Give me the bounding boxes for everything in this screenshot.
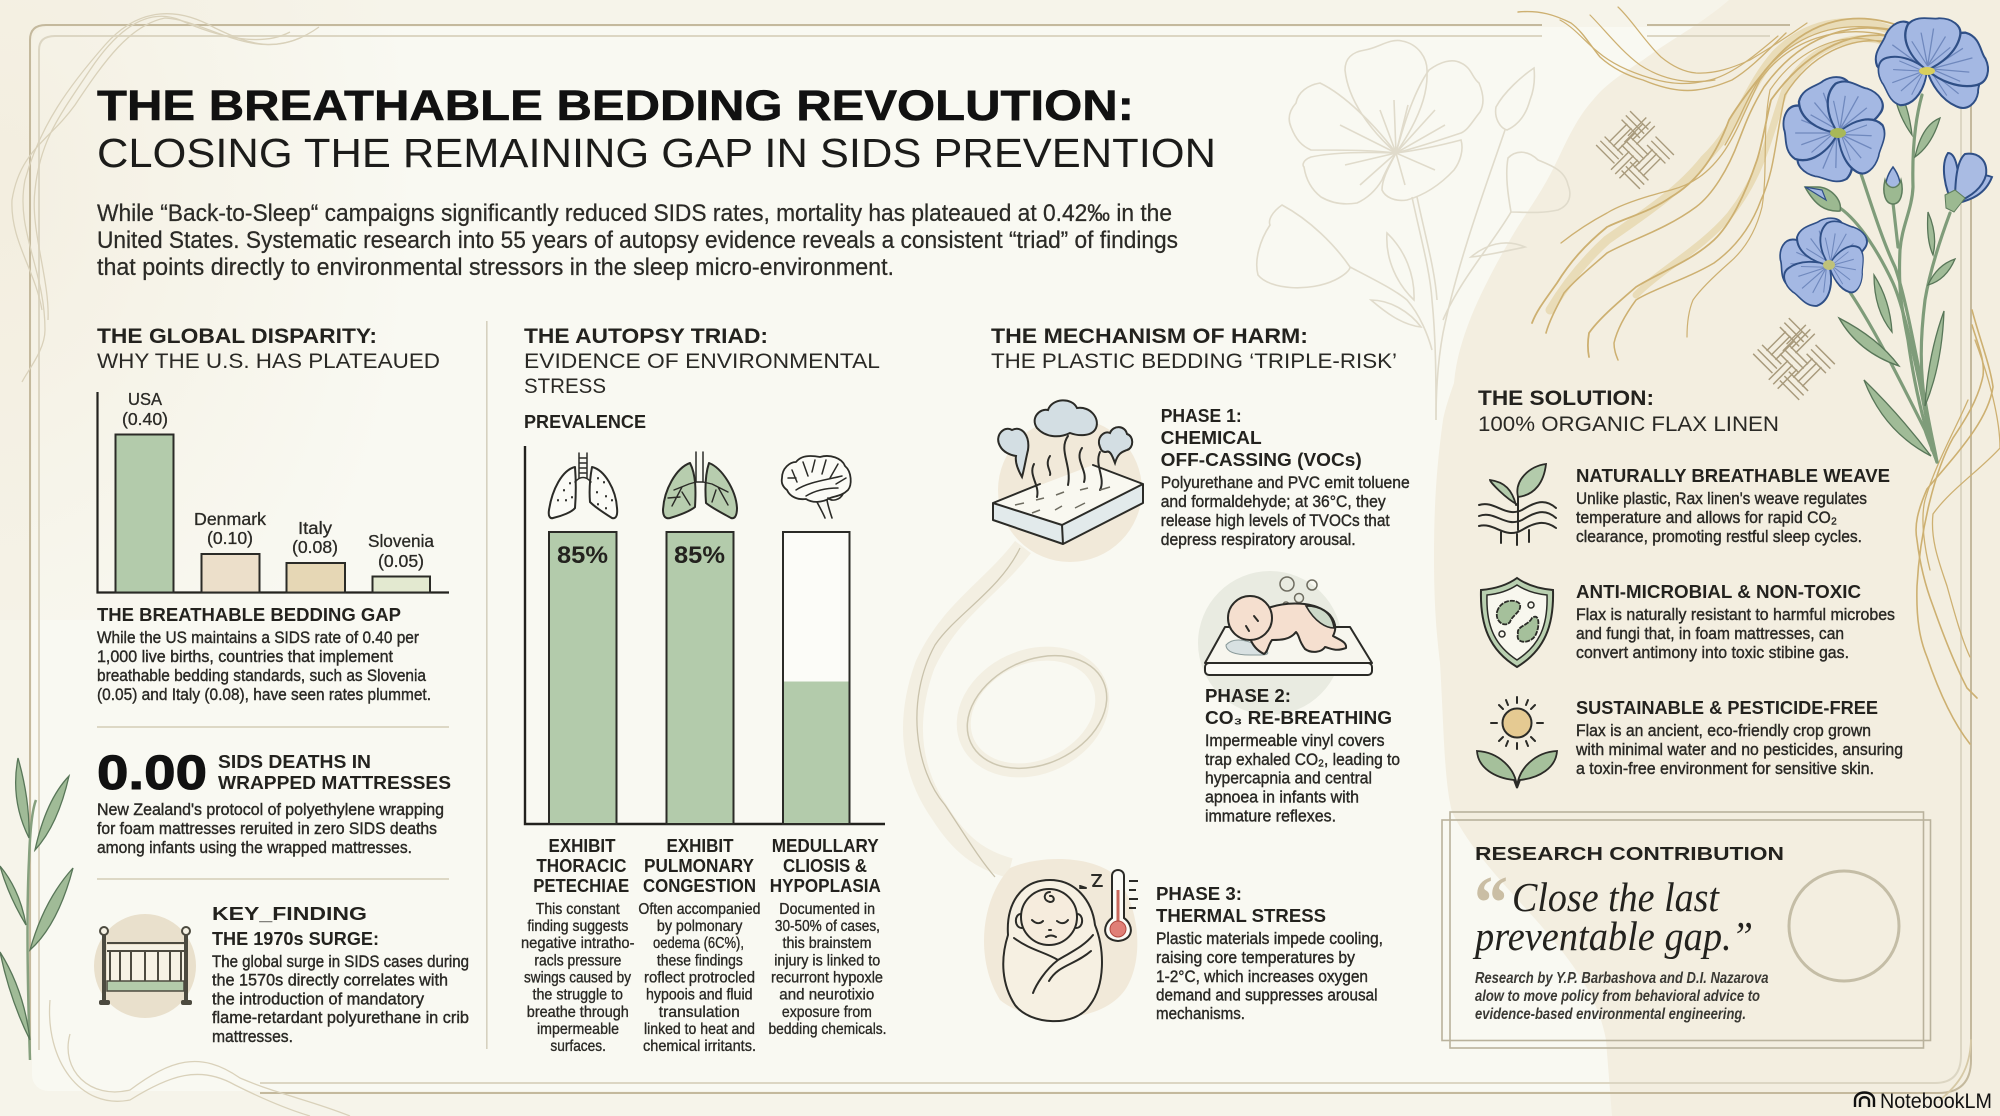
text block: phase 2: immature reflexes.	[1205, 806, 1336, 826]
text block: pulmonary congestion: chemical irritants.	[643, 1038, 756, 1055]
heading: the solution: 100% ORGANIC FLAX LINEN	[1478, 413, 1779, 436]
panel: the global disparity	[94, 325, 469, 1046]
intro paragraph: United States. Systematic research into 55 years of autopsy evidence reveals a consistent “triad” of findings	[97, 227, 1178, 254]
text block: pulmonary congestion: transulation	[659, 1004, 740, 1021]
labels: autopsy findings: CLIOSIS &	[783, 856, 867, 876]
text block: phase 1: PHASE 1:	[1161, 406, 1242, 426]
text block: phase 1: OFF-CASSING (VOCs)	[1161, 450, 1362, 470]
text block: naturally breathable weave: clearance, promoting restful sleep cycles.	[1576, 527, 1862, 546]
bar chart: SIDS rate by country: (0.08)	[292, 537, 338, 557]
text block: anti-microbial	[1576, 582, 1895, 662]
text block: medullary gliosis: injury is linked to	[774, 952, 880, 970]
text block: pulmonary congestion: by polmonary	[657, 918, 742, 935]
illustration: blue flax flowers and stems	[1779, 13, 1992, 462]
text block: pulmonary congestion	[638, 901, 760, 1055]
text block: phase 1: depress respiratory arousal.	[1161, 530, 1356, 549]
callout: research contribution: RESEARCH CONTRIBUTION	[1475, 844, 1784, 864]
callout: research contribution: “	[1474, 861, 1508, 945]
panel: the autopsy triad	[521, 325, 886, 1055]
text block: phase 2: trap exhaled CO₂, leading to	[1205, 750, 1400, 769]
heading: autopsy triad: STRESS	[524, 375, 606, 398]
bar chart: SIDS rate by country: Slovenia	[368, 531, 434, 551]
bar chart: SIDS rate by country: USA	[128, 389, 162, 409]
callout: research contribution	[1442, 812, 1930, 1048]
bar chart: SIDS rate by country: (0.05)	[378, 551, 424, 571]
heading: mechanism of harm: THE MECHANISM OF HARM:	[991, 325, 1308, 348]
text block: sustainable	[1575, 698, 1903, 778]
text block: thoracic petechiae: breathe through	[527, 1004, 629, 1021]
text block: key finding: the introduction of mandatory	[212, 990, 424, 1008]
text block: pulmonary congestion: linked to heat and	[644, 1021, 755, 1038]
text block: thoracic petechiae	[521, 901, 634, 1055]
text block: naturally breathable weave: temperature and allows for rapid CO₂	[1576, 508, 1837, 527]
panel: the solution	[1477, 387, 1903, 788]
labels: autopsy findings: PETECHIAE	[533, 876, 629, 896]
title: CLOSING THE REMAINING GAP IN SIDS PREVENTION	[97, 130, 1216, 176]
text block: phase 3: PHASE 3:	[1156, 884, 1242, 904]
icon: woven texture swatches	[1591, 106, 1840, 405]
text block: naturally breathable weave: Unlike plastic, Rax linen's weave regulates	[1576, 489, 1867, 508]
intro paragraph: While “Back-to-Sleep“ campaigns significantly reduced SIDS rates, mortality has plateaued at 0.42‰ in the	[97, 200, 1172, 227]
text block: thoracic petechiae: racls pressure	[534, 952, 621, 970]
heading: autopsy triad	[524, 325, 880, 432]
text block: phase 1: and formaldehyde; at 36°C, they	[1161, 492, 1386, 511]
text block: phase 1: CHEMICAL	[1161, 428, 1262, 448]
text block: phase 3	[1156, 884, 1383, 1023]
text block: naturally breathable weave: NATURALLY BREATHABLE WEAVE	[1576, 466, 1890, 486]
stat: 0.00 SIDS deaths	[97, 747, 451, 857]
text block: phase 1: Polyurethane and PVC emit toluene	[1161, 473, 1410, 492]
labels: autopsy findings: MEDULLARY	[772, 836, 879, 856]
text block: breathable bedding gap: While the US maintains a SIDS rate of 0.40 per	[97, 628, 419, 647]
bar chart: SIDS rate by country: Italy	[298, 518, 332, 538]
text block: phase 2: hypercapnia and central	[1205, 768, 1372, 788]
bar chart: SIDS rate by country: (0.10)	[207, 528, 253, 548]
title: THE BREATHABLE BEDDING REVOLUTION:	[97, 82, 1134, 130]
text block: pulmonary congestion: these findings	[657, 952, 743, 970]
icon: baby sleeping on mattress	[1198, 571, 1372, 715]
text block: breathable bedding gap	[97, 605, 431, 704]
text block: pulmonary congestion: roflect protrocled	[644, 970, 755, 986]
text block: breathable bedding gap: breathable bedding standards, such as Slovenia	[97, 666, 426, 685]
text block: sustainable: with minimal water and no pesticides, ansuring	[1575, 740, 1903, 759]
decorative fibres bottom-left	[50, 1000, 350, 1116]
icon: sun over flax sprout	[1477, 697, 1557, 788]
text block: pulmonary congestion: oedema (6C%),	[653, 935, 744, 952]
text block: medullary gliosis: bedding chemicals.	[768, 1021, 886, 1038]
callout: research contribution: evidence-based environmental engineering.	[1475, 1006, 1746, 1023]
labels: autopsy findings: EXHIBIT	[548, 836, 616, 856]
text block: anti-microbial: convert antimony into toxic stibine gas.	[1576, 643, 1849, 662]
text block: breathable bedding gap: (0.05) and Italy (0.08), have seen rates plummet.	[97, 685, 431, 704]
text block: phase 3: 1-2°C, which increases oxygen	[1156, 967, 1368, 986]
stat: 0.00 SIDS deaths: for foam mattresses reruited in zero SIDS deaths	[97, 819, 437, 838]
heading: the solution: THE SOLUTION:	[1478, 387, 1654, 410]
text block: key finding	[212, 904, 469, 1046]
intro paragraph	[97, 200, 1178, 281]
heading: mechanism of harm	[991, 325, 1397, 373]
decorative background ribbon linking phases	[913, 547, 1125, 877]
decorative fibres top-left	[12, 14, 319, 382]
text block: thoracic petechiae: the struggle to	[532, 986, 623, 1004]
text block: phase 2	[1205, 686, 1400, 826]
icon: shield with microbes	[1481, 578, 1553, 667]
stat: 0.00 SIDS deaths: among infants using the wrapped mattresses.	[97, 838, 412, 857]
text block: sustainable: a toxin-free environment for sensitive skin.	[1576, 759, 1874, 778]
heading: global disparity	[97, 325, 440, 373]
bar chart: autopsy prevalence	[525, 446, 885, 824]
text block: key finding: The global surge in SIDS cases during	[212, 952, 469, 971]
labels: autopsy findings: EXHIBIT	[666, 836, 734, 856]
bar chart: autopsy prevalence: 85%	[557, 542, 608, 569]
text block: key finding: flame-retardant polyurethane in crib	[212, 1008, 469, 1027]
beige organic panel behind the solution	[1434, 0, 2000, 1116]
heading: autopsy triad: PREVALENCE	[524, 412, 646, 432]
heading: the solution	[1478, 387, 1779, 436]
warm tint top-left	[0, 0, 420, 620]
text block: phase 1: release high levels of TVOCs that	[1161, 511, 1390, 530]
stat: 0.00 SIDS deaths: SIDS DEATHS IN	[218, 752, 371, 772]
watermark: NotebookLM: NotebookLM	[1880, 1090, 1992, 1113]
text block: phase 2: CO₃ RE-BREATHING	[1205, 708, 1392, 728]
text block: pulmonary congestion: hypoois and fluid	[646, 986, 752, 1004]
text block: medullary gliosis: this brainstem	[782, 935, 872, 952]
intro paragraph: that points directly to environmental stressors in the sleep micro-environment.	[97, 254, 894, 281]
text block: key finding: mattresses.	[212, 1027, 293, 1046]
callout: research contribution: Close the last	[1512, 874, 1720, 920]
heading: global disparity: WHY THE U.S. HAS PLATEAUED	[97, 350, 440, 373]
heading: mechanism of harm: THE PLASTIC BEDDING ‘TRIPLE-RISK’	[991, 350, 1397, 373]
labels: autopsy findings: HYPOPLASIA	[770, 876, 881, 896]
stat: 0.00 SIDS deaths: New Zealand's protocol of polyethylene wrapping	[97, 800, 444, 819]
heading: global disparity: THE GLOBAL DISPARITY:	[97, 325, 377, 348]
icon: congested lungs	[663, 452, 737, 518]
labels: autopsy findings: PULMONARY	[644, 856, 754, 876]
text block: medullary gliosis: recurront hypoxle	[771, 970, 883, 986]
text block: key finding: THE 1970s SURGE:	[212, 929, 379, 949]
text block: phase 3: Plastic materials impede cooling,	[1156, 929, 1383, 948]
icon: swaddled baby with thermometer	[984, 859, 1138, 1021]
text block: medullary gliosis	[768, 901, 886, 1038]
text block: anti-microbial: and fungi that, in foam mattresses, can	[1576, 624, 1844, 643]
heading: autopsy triad: THE AUTOPSY TRIAD:	[524, 325, 768, 348]
text block: phase 1	[1161, 406, 1410, 549]
decorative golden flax fibres	[1518, 7, 2000, 1100]
bar chart: SIDS rate by country	[98, 389, 449, 592]
text block: key finding: KEY_FINDING	[212, 904, 367, 924]
callout: research contribution: Research by Y.P. Barbashova and D.I. Nazarova	[1475, 970, 1769, 987]
icon: plant over woven waves	[1479, 464, 1556, 545]
text block: medullary gliosis: exposure from	[782, 1004, 872, 1021]
text block: key finding: the 1570s directly correlates with	[212, 970, 448, 990]
text block: thoracic petechiae: impermeable	[537, 1021, 619, 1038]
text block: sustainable: SUSTAINABLE & PESTICIDE-FREE	[1576, 698, 1878, 718]
text block: thoracic petechiae: This constant	[536, 901, 620, 918]
text block: medullary gliosis: Documented in	[779, 901, 875, 918]
stat: 0.00 SIDS deaths: WRAPPED MATTRESSES	[218, 773, 451, 793]
text block: anti-microbial: Flax is naturally resistant to harmful microbes	[1576, 605, 1895, 624]
panel: mechanism of harm	[984, 325, 1410, 1023]
text block: thoracic petechiae: finding suggests	[527, 918, 628, 935]
icon: left green leaf sprig	[0, 758, 73, 1060]
icon: lungs with petechiae	[549, 453, 617, 518]
icon: brain	[782, 456, 851, 518]
icon: off-gassing mattress	[993, 400, 1143, 562]
text block: phase 2: Impermeable vinyl covers	[1205, 731, 1384, 750]
text block: thoracic petechiae: swings caused by	[524, 970, 631, 986]
text block: phase 3: mechanisms.	[1156, 1004, 1245, 1023]
text block: medullary gliosis: and neurotixio	[779, 986, 874, 1004]
text block: breathable bedding gap: 1,000 live births, countries that implement	[97, 647, 393, 666]
text block: phase 2: apnoea in infants with	[1205, 788, 1359, 806]
text block: phase 3: demand and suppresses arousal	[1156, 986, 1378, 1004]
text block: breathable bedding gap: THE BREATHABLE BEDDING GAP	[97, 605, 401, 625]
labels: autopsy findings: CONGESTION	[643, 876, 756, 896]
text block: anti-microbial: ANTI-MICROBIAL & NON-TOXIC	[1576, 582, 1861, 602]
bar chart: autopsy prevalence: 85%	[674, 542, 725, 569]
heading: autopsy triad: EVIDENCE OF ENVIRONMENTAL	[524, 350, 880, 373]
text block: sustainable: Flax is an ancient, eco-friendly crop grown	[1576, 721, 1871, 740]
stat: 0.00 SIDS deaths: 0.00	[97, 747, 207, 800]
bar chart: SIDS rate by country: (0.40)	[122, 409, 168, 429]
text block: medullary gliosis: 30-50% of cases,	[775, 918, 880, 935]
text block: pulmonary congestion: Often accompanied	[638, 901, 760, 918]
callout: research contribution: alow to move policy from behavioral advice to	[1475, 988, 1760, 1005]
text block: phase 3: THERMAL STRESS	[1156, 906, 1326, 926]
labels: autopsy findings: THORACIC	[536, 856, 626, 876]
faint line-art flax flower	[1257, 40, 1570, 420]
title	[97, 82, 1216, 176]
text block: naturally breathable weave	[1576, 466, 1890, 546]
labels: autopsy findings	[533, 836, 881, 896]
callout: research contribution: preventable gap.”	[1472, 913, 1753, 959]
icon: crib	[94, 914, 196, 1018]
text block: phase 3: raising core temperatures by	[1156, 948, 1355, 967]
bar chart: SIDS rate by country: Denmark	[194, 509, 266, 529]
text block: thoracic petechiae: negative intratho-	[521, 935, 634, 952]
text block: phase 2: PHASE 2:	[1205, 686, 1291, 706]
text block: thoracic petechiae: surfaces.	[550, 1038, 606, 1055]
